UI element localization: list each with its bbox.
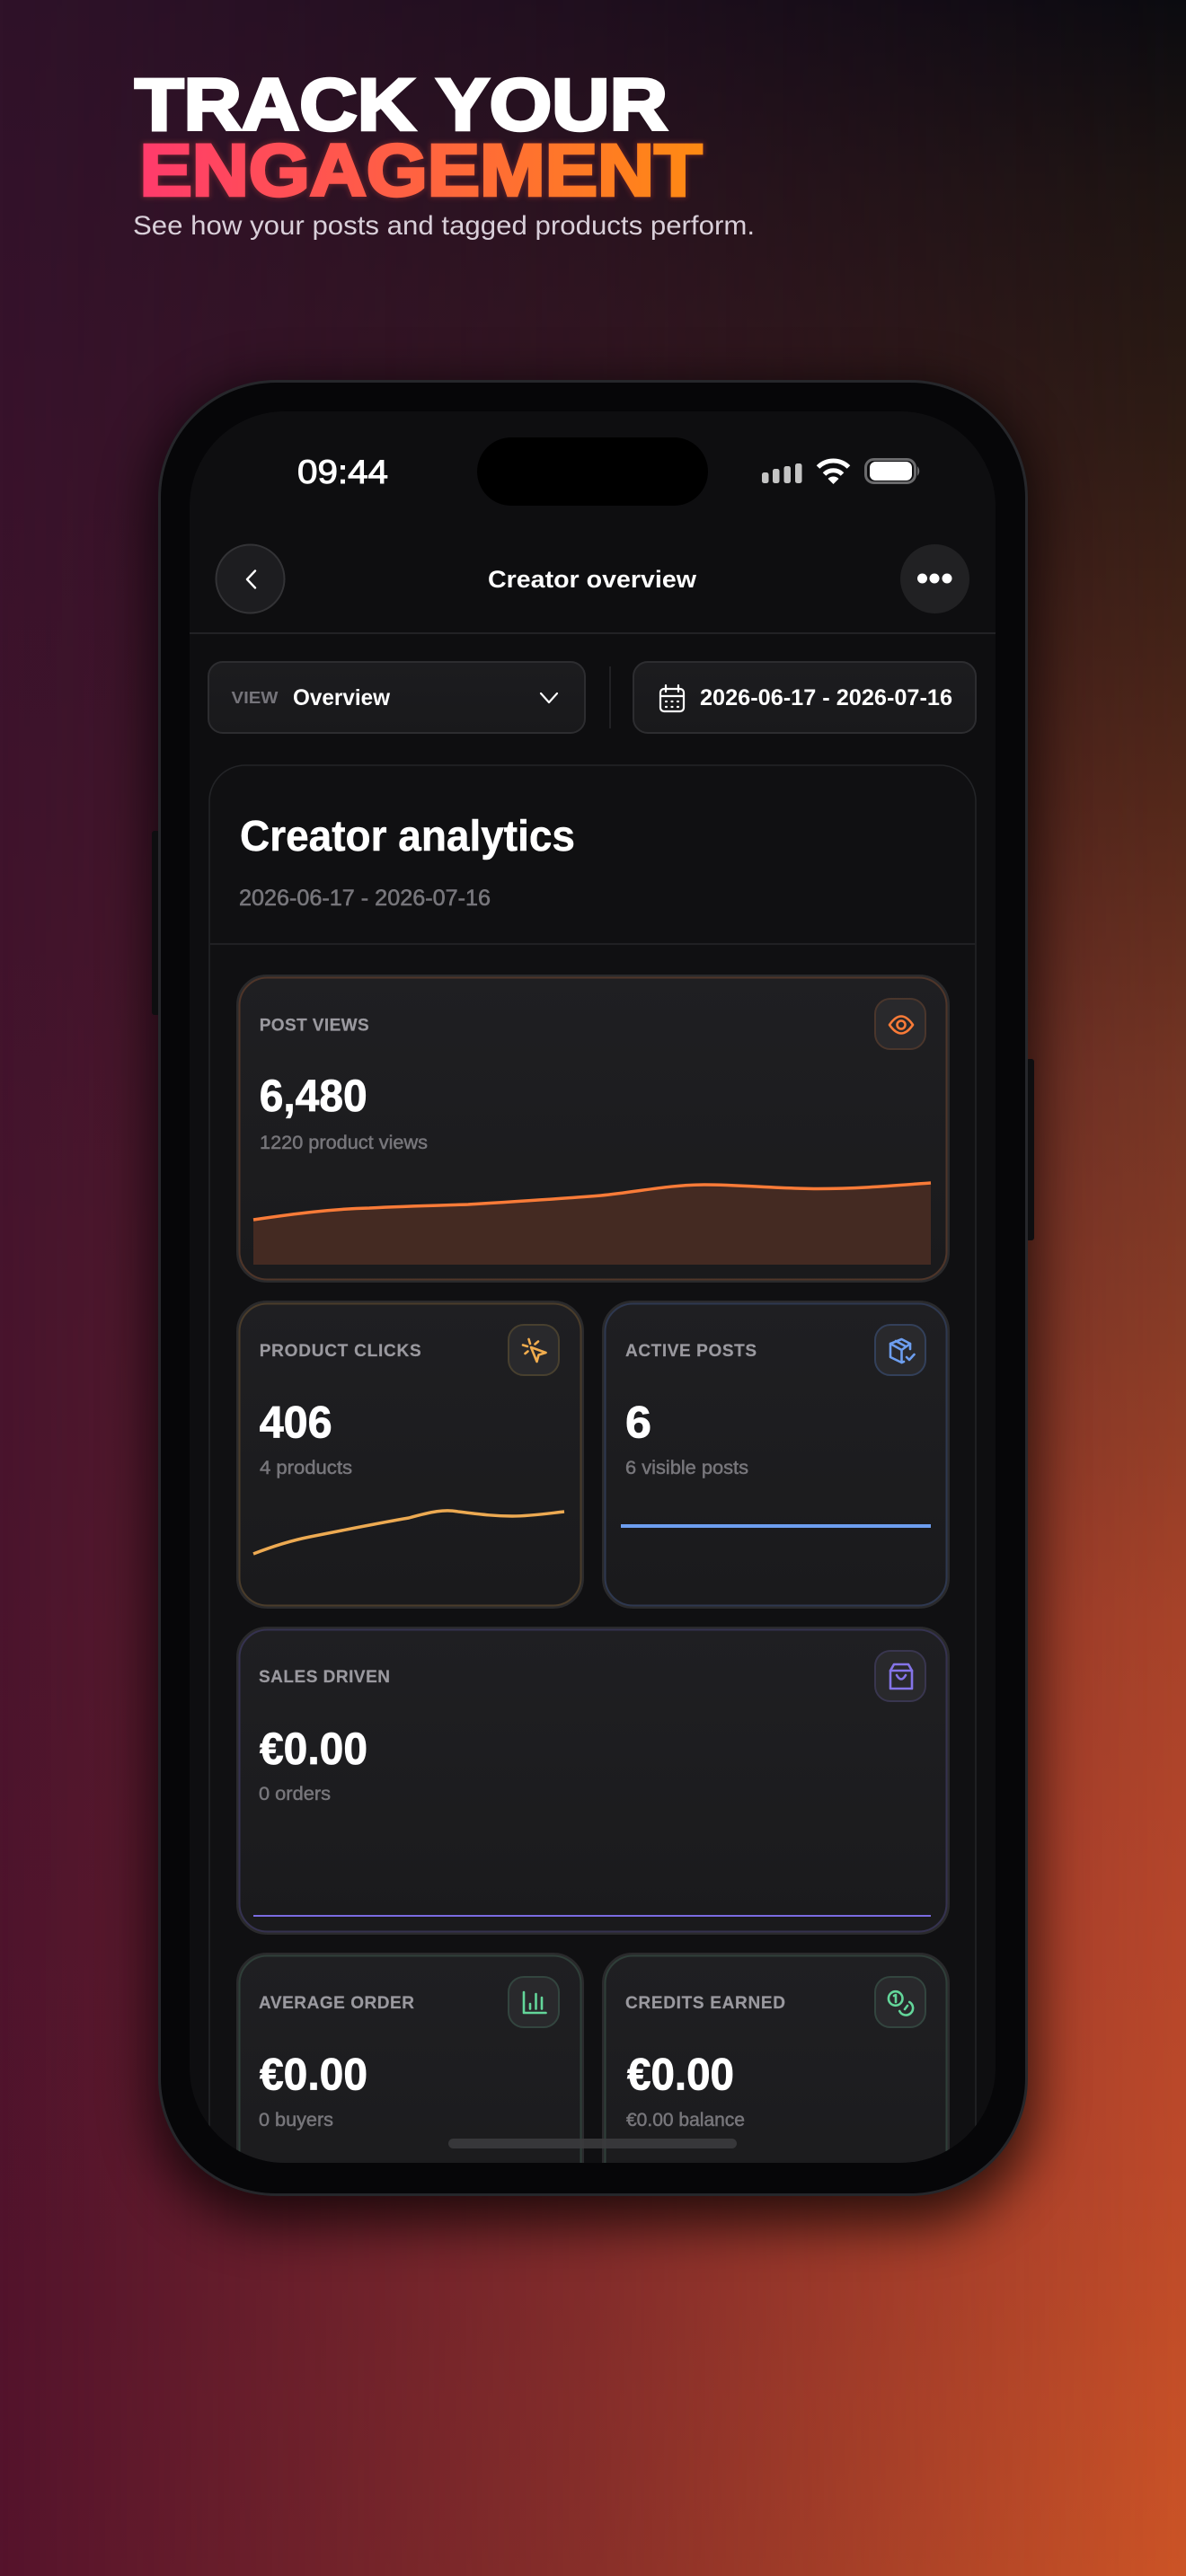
card: post views: 1220 product views (260, 1133, 428, 1153)
phone mockup (152, 381, 1034, 2292)
card: active posts: 6 (625, 1398, 651, 1448)
line chart: sales driven (253, 1915, 931, 1917)
icon: chevron down (541, 693, 557, 702)
card: post views: POST VIEWS (260, 1017, 369, 1035)
card: product clicks: PRODUCT CLICKS (260, 1342, 421, 1361)
dynamic island (477, 437, 708, 506)
view value: Overview (293, 685, 391, 710)
subtitle: See how your posts and tagged products perform. (133, 211, 755, 241)
card: sales driven (238, 1628, 948, 1933)
side button left (152, 831, 160, 1015)
card: credits earned: €0.00 (627, 2050, 734, 2100)
panel date range: 2026-06-17 - 2026-07-16 (239, 886, 491, 911)
icon: cursor click (509, 1325, 559, 1375)
icon: bar chart (509, 1977, 559, 2027)
heading line: track your: TRACK YOUR (135, 64, 668, 146)
card: product clicks: 4 products (260, 1458, 352, 1478)
icon: calendar (660, 685, 684, 711)
heading glow: ENGAGEMENT (140, 129, 703, 211)
battery (866, 460, 919, 483)
view selector (208, 662, 585, 733)
line chart: product clicks (253, 1511, 564, 1554)
icon: shopping bag (875, 1651, 925, 1701)
view label: VIEW (232, 689, 279, 707)
header title: Creator overview (488, 566, 697, 593)
card: product clicks (238, 1302, 582, 1607)
card: active posts (604, 1302, 948, 1607)
card: post views: 6,480 (260, 1071, 367, 1121)
date range selector (633, 662, 976, 733)
heading line: engagement: ENGAGEMENT (140, 129, 703, 211)
icon: coins (875, 1977, 925, 2027)
phone body (160, 381, 1026, 2195)
card: average order: AVERAGE ORDER (259, 1994, 414, 2013)
card: post views (238, 976, 948, 1281)
card: active posts: ACTIVE POSTS (625, 1342, 757, 1361)
card: credits earned: €0.00 balance (626, 2110, 745, 2130)
home indicator (448, 2139, 737, 2148)
side button right (1026, 1059, 1034, 1240)
signal bars (762, 463, 801, 483)
title: track your engagement (133, 64, 755, 241)
area chart: post views (253, 1183, 931, 1265)
more button (900, 544, 969, 613)
screen background (190, 411, 996, 2163)
line chart: active posts (621, 1524, 931, 1528)
card: sales driven: €0.00 (260, 1724, 367, 1774)
panel heading: Creator analytics (240, 813, 575, 860)
card: average order: 0 buyers (259, 2110, 333, 2130)
panel: creator analytics (209, 765, 976, 2292)
screen (190, 411, 996, 2292)
card: average order: €0.00 (260, 2050, 367, 2100)
card: product clicks: 406 (260, 1398, 332, 1448)
phone shadow (153, 386, 1033, 2223)
card: credits earned: CREDITS EARNED (625, 1994, 785, 2013)
wifi (818, 461, 848, 484)
card: average order (238, 1954, 582, 2259)
time: 09:44 (297, 454, 388, 490)
status bar (297, 437, 919, 506)
card: sales driven: 0 orders (259, 1784, 331, 1804)
card: credits earned (604, 1954, 948, 2259)
back button (216, 544, 284, 613)
date range text: 2026-06-17 - 2026-07-16 (700, 685, 952, 710)
icon: package check (875, 1325, 925, 1375)
card: sales driven: SALES DRIVEN (259, 1668, 390, 1687)
icon: eye (875, 999, 925, 1049)
card: active posts: 6 visible posts (625, 1458, 748, 1478)
